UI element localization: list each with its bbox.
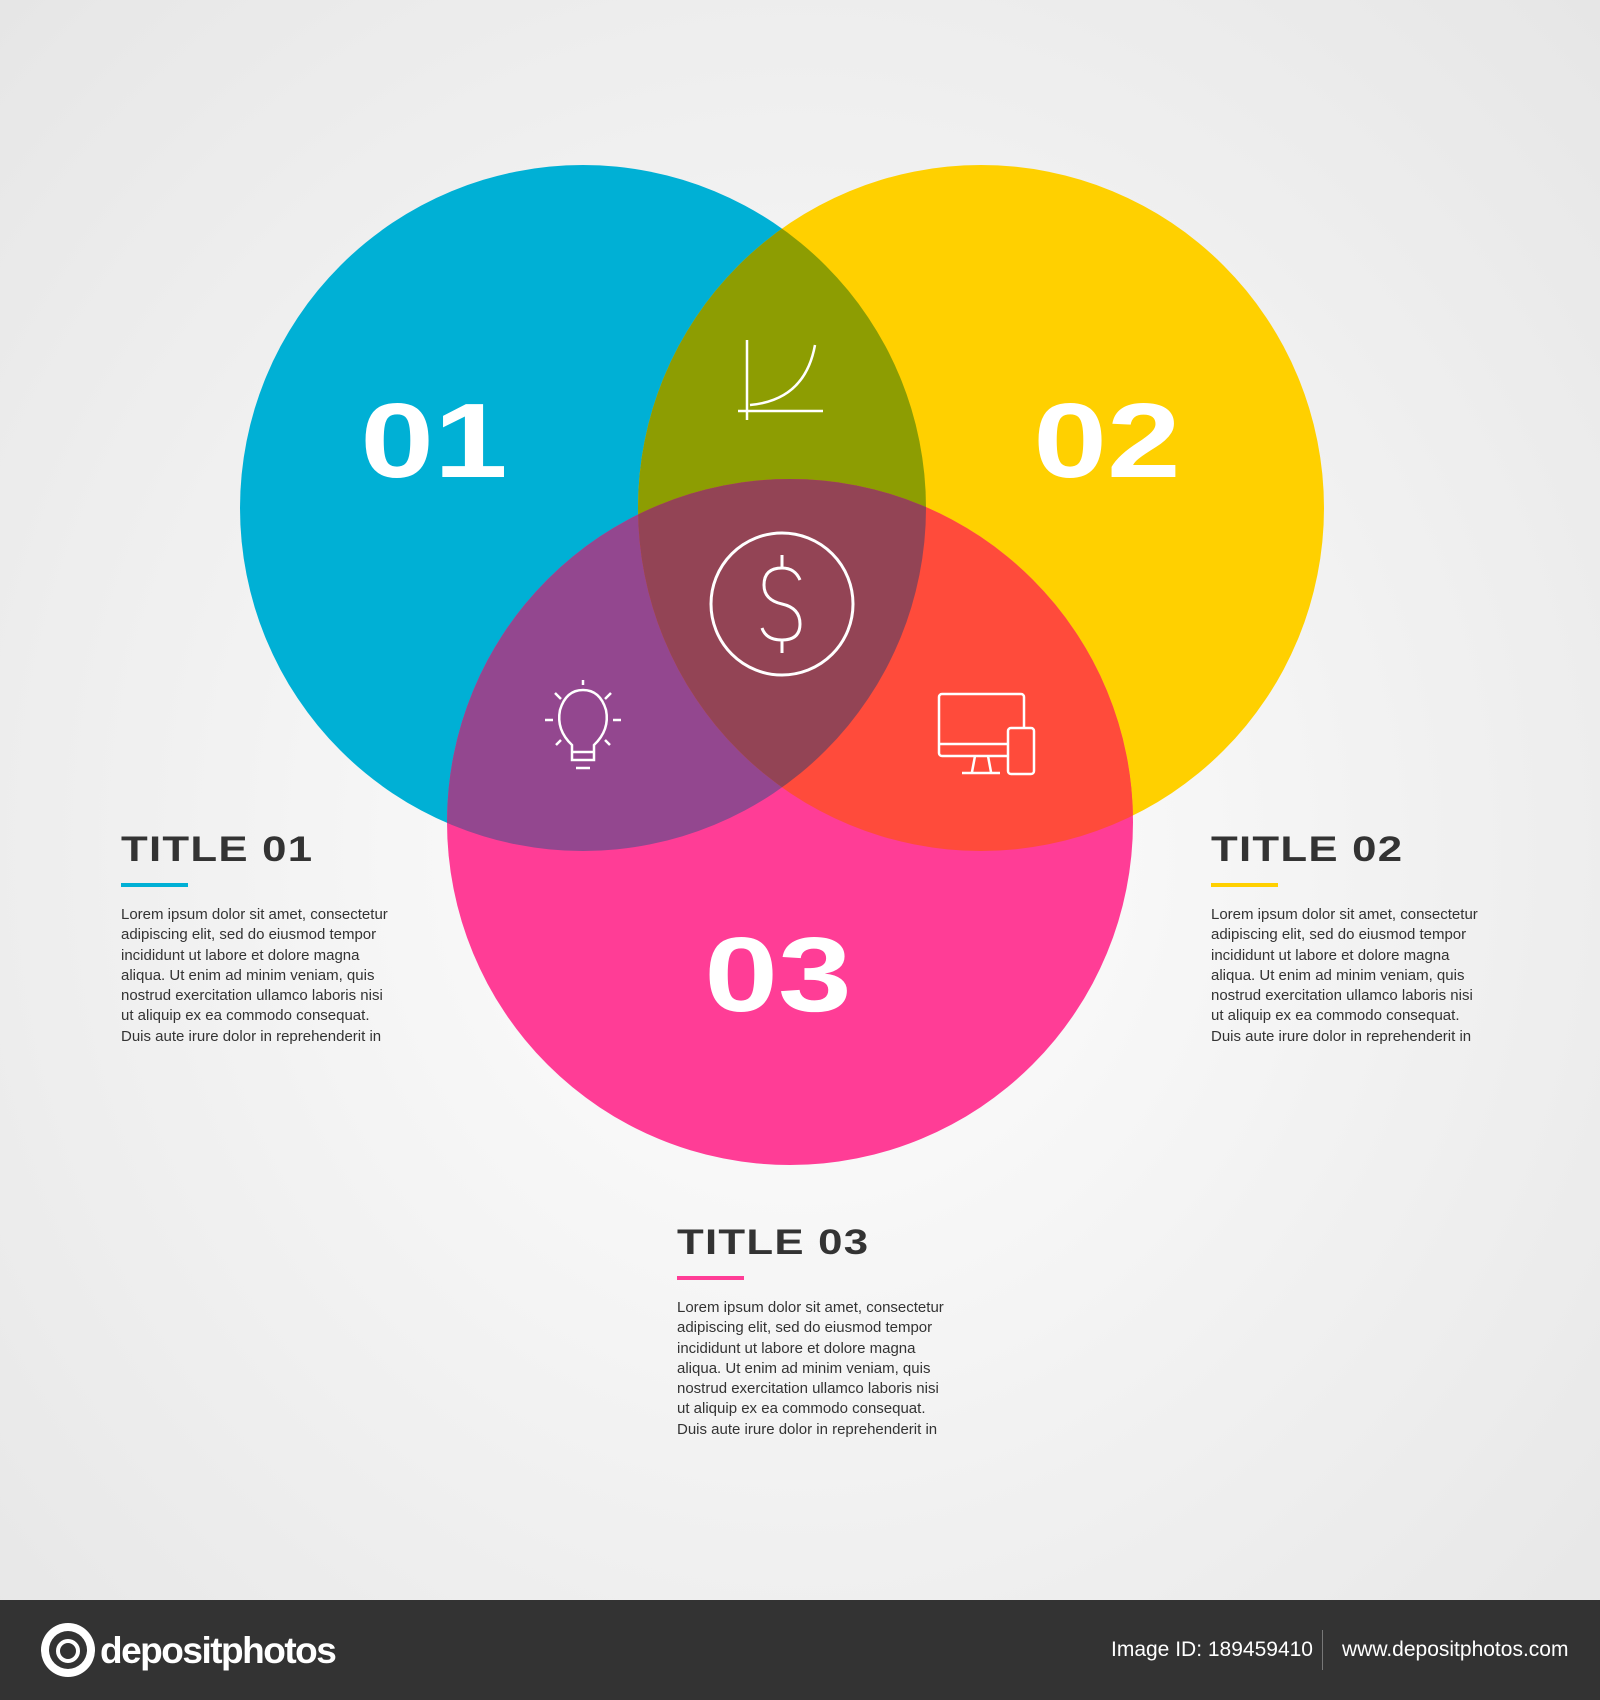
number 02: 02 — [1033, 382, 1181, 500]
overlap: yellow-pink — [638, 479, 1133, 851]
text: description 01: Duis aute irure dolor in reprehenderit in — [121, 1028, 381, 1045]
icon: bulb — [545, 680, 621, 768]
underline — [677, 1276, 744, 1280]
number 03: 03 — [704, 916, 852, 1034]
text: description 01: ut aliquip ex ea commodo consequat. — [121, 1007, 370, 1024]
underline — [121, 883, 188, 887]
footer logo: depositphotos — [100, 1630, 335, 1671]
overlap: blue-yellow — [638, 228, 926, 514]
circle: 02 yellow — [638, 165, 1324, 851]
text: description 03: aliqua. Ut enim ad minim veniam, quis — [677, 1360, 930, 1377]
footer image id: Image ID: 189459410 — [1111, 1638, 1313, 1661]
text: description 02: nostrud exercitation ullamco laboris nisi — [1211, 987, 1473, 1004]
venn diagram — [240, 165, 1324, 1165]
text: description 02: incididunt ut labore et dolore magna — [1211, 947, 1450, 964]
text: description 02: ut aliquip ex ea commodo consequat. — [1211, 1007, 1460, 1024]
circle: 01 blue — [240, 165, 926, 851]
icon: devices — [939, 694, 1034, 774]
text: description 03: Duis aute irure dolor in reprehenderit in — [677, 1421, 937, 1438]
text: description 02: aliqua. Ut enim ad minim veniam, quis — [1211, 967, 1464, 984]
underline — [1211, 883, 1278, 887]
footer bar — [0, 1600, 1600, 1700]
overlap: center — [638, 479, 926, 788]
text: description 01 — [121, 906, 388, 1045]
text: description 01: nostrud exercitation ullamco laboris nisi — [121, 987, 383, 1004]
icon: camera logo — [41, 1623, 95, 1677]
text: description 01: aliqua. Ut enim ad minim veniam, quis — [121, 967, 374, 984]
text: description 03: Lorem ipsum dolor sit amet, consectetur — [677, 1299, 944, 1316]
text: description 02: adipiscing elit, sed do eiusmod tempor — [1211, 926, 1466, 943]
block: title 02 — [1211, 830, 1478, 1045]
heading: title 03: TITLE 03 — [677, 1223, 869, 1262]
footer url: www.depositphotos.com — [1342, 1638, 1568, 1661]
text: description 01: Lorem ipsum dolor sit amet, consectetur — [121, 906, 388, 923]
text: description 02: Lorem ipsum dolor sit amet, consectetur — [1211, 906, 1478, 923]
text: description 03: adipiscing elit, sed do eiusmod tempor — [677, 1319, 932, 1336]
heading: title 02: TITLE 02 — [1211, 830, 1403, 869]
text: description 01: adipiscing elit, sed do eiusmod tempor — [121, 926, 376, 943]
text: description 03: nostrud exercitation ullamco laboris nisi — [677, 1380, 939, 1397]
icon: dollar — [711, 533, 853, 675]
block: title 01 — [121, 830, 388, 1045]
text: description 02 — [1211, 906, 1478, 1045]
block: title 03 — [677, 1223, 944, 1438]
icon: chart — [738, 340, 823, 420]
overlap: blue-pink — [447, 479, 926, 851]
text: description 01: incididunt ut labore et dolore magna — [121, 947, 360, 964]
number 01: 01 — [360, 382, 508, 500]
text: description 03: ut aliquip ex ea commodo consequat. — [677, 1400, 926, 1417]
footer logo — [41, 1623, 336, 1677]
heading: title 01: TITLE 01 — [121, 830, 313, 869]
text: description 02: Duis aute irure dolor in reprehenderit in — [1211, 1028, 1471, 1045]
circle: 03 pink — [447, 479, 1133, 1165]
text: description 03 — [677, 1299, 944, 1438]
text: description 03: incididunt ut labore et dolore magna — [677, 1340, 916, 1357]
